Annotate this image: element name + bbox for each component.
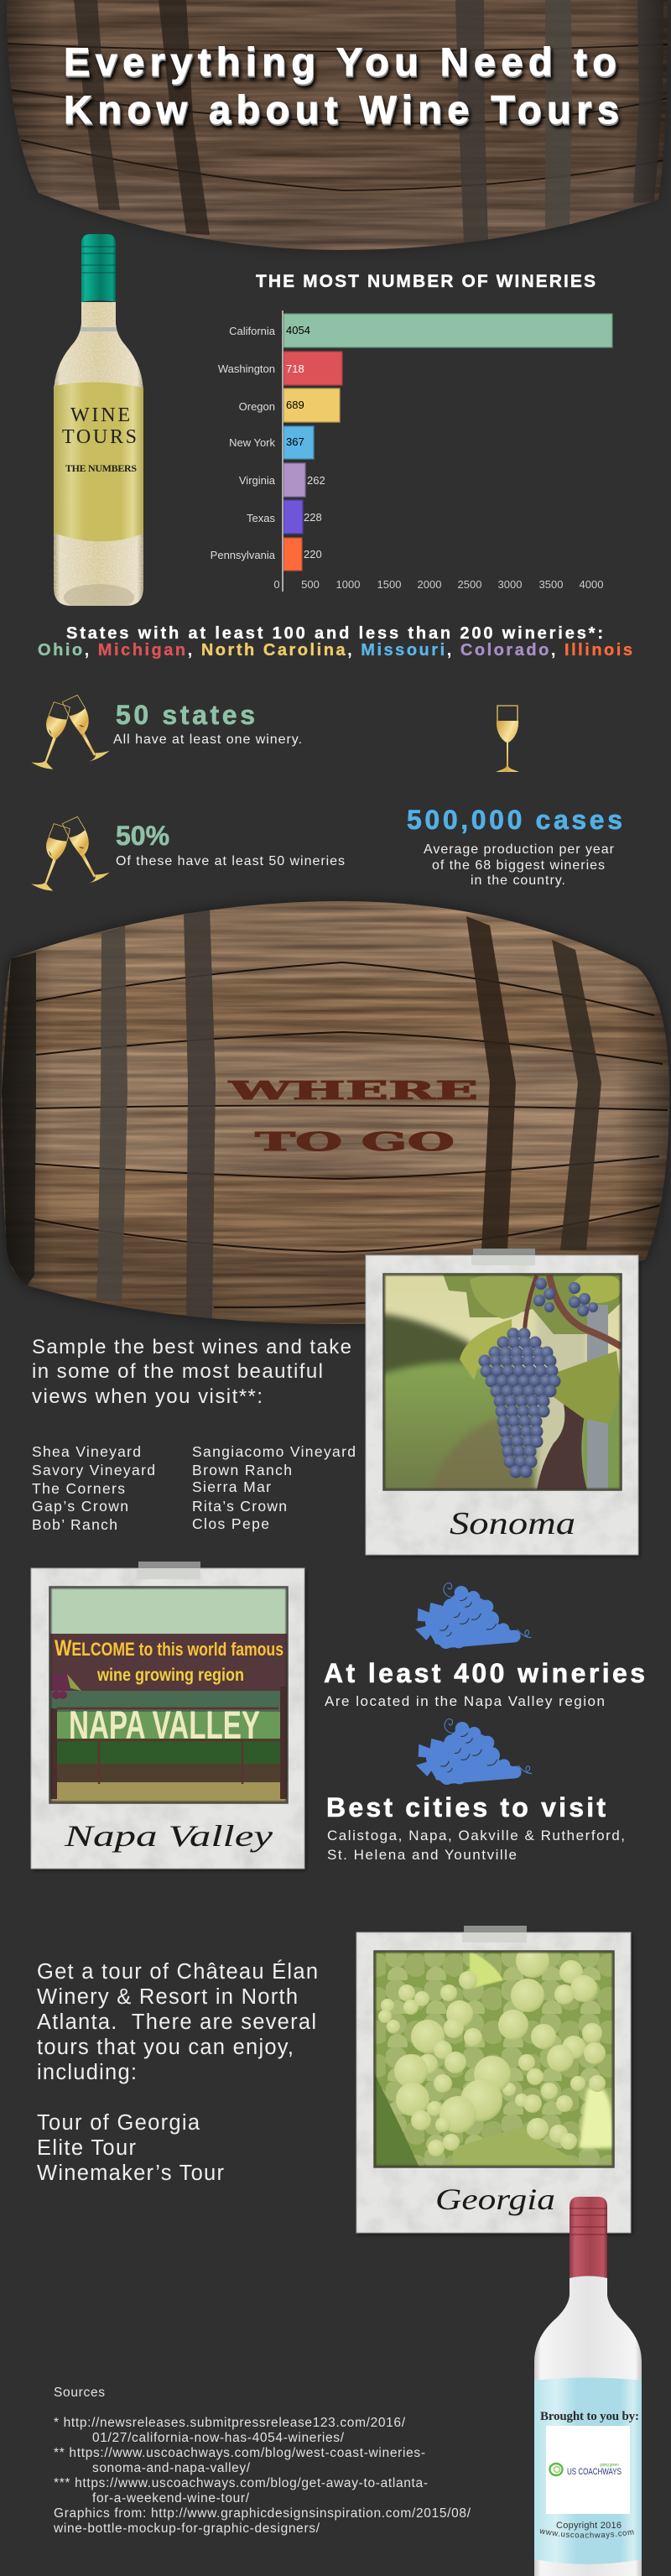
Georgia text: tours that you can enjoy,: [37, 2036, 294, 2059]
value labels: [286, 324, 325, 561]
photo: grapes on vine: [377, 1273, 629, 1494]
states heading: Ohio, Michigan, North Carolina, Missouri, Colorado, Illinois: [38, 641, 632, 660]
vineyard list: [32, 1443, 356, 1533]
value labels: 262: [307, 474, 325, 487]
Georgia text: Winemaker’s Tour: [37, 2161, 225, 2185]
barrel text: WHERE: [227, 1077, 478, 1106]
vineyard list: Rita’s Crown: [192, 1498, 287, 1515]
wine bottle: brought to you by: [534, 2197, 642, 2576]
stat: 50%: 50%: [116, 821, 169, 851]
intro text: Sample the best wines and take: [32, 1336, 351, 1358]
value labels: 689: [286, 399, 304, 411]
wine bottle: wine tours the numbers: [50, 234, 147, 611]
tape: [137, 1562, 200, 1579]
sign text: [55, 1640, 283, 1739]
state labels: Washington: [218, 362, 275, 375]
stat: 50 states: 50 states: [116, 700, 255, 730]
sign text: WELCOME to this world famous: [55, 1635, 283, 1661]
Georgia text: Winery & Resort in North: [37, 1985, 298, 2009]
axis ticks: 4000: [580, 578, 603, 591]
best cities: St. Helena and Yountville: [327, 1847, 517, 1863]
caption: Georgia: [435, 2182, 555, 2216]
title: [64, 39, 619, 132]
copyright text: [540, 2521, 634, 2539]
title: Know about Wine Tours: [64, 87, 619, 132]
axis ticks: 500: [301, 578, 320, 591]
Georgia text: including:: [37, 2061, 137, 2084]
chart title: THE MOST NUMBER OF WINERIES: [256, 272, 596, 291]
intro text: in some of the most beautiful: [32, 1360, 323, 1383]
stat: 500,000 cases: of the 68 biggest wineries: [432, 858, 605, 873]
axis ticks: 2500: [458, 578, 481, 591]
vineyard list: Shea Vineyard: [32, 1443, 141, 1460]
polaroid: Sonoma: [366, 1249, 640, 1557]
polaroid: Georgia: [356, 1926, 632, 2234]
Georgia text: Atlanta. There are several: [37, 2010, 316, 2034]
label text: TOURS: [62, 426, 137, 448]
white logo panel: [546, 2426, 630, 2514]
value labels: 718: [286, 362, 304, 375]
barrel text: [227, 1077, 478, 1157]
Georgia text: [37, 1959, 318, 2185]
barrel text: TO GO: [255, 1128, 455, 1157]
bar chart: wineries by state: [211, 310, 612, 592]
sources: ** https://www.uscoachways.com/blog/west-coast-wineries-: [54, 2446, 425, 2460]
bottle cap: [570, 2197, 607, 2278]
copyright text: www.uscoachways.com: [540, 2529, 634, 2539]
bottle cap: [81, 234, 116, 302]
stat: 50%: Of these have at least 50 wineries: [116, 854, 345, 868]
axis ticks: 3500: [539, 578, 563, 591]
icon: grapes: [416, 1719, 532, 1785]
vineyard list: Brown Ranch: [192, 1462, 292, 1478]
stat: 400 wineries: Are located in the Napa Valley region: [325, 1693, 605, 1709]
label heading: Brought to you by:: [540, 2410, 639, 2423]
icon: clinking glasses: [31, 816, 110, 891]
axis ticks: 2000: [418, 578, 441, 591]
state labels: [211, 325, 276, 561]
stat: 400 wineries: At least 400 wineries: [324, 1658, 645, 1688]
Georgia text: Tour of Georgia: [37, 2111, 200, 2135]
stat: 500,000 cases: in the country.: [471, 873, 565, 888]
axis ticks: 3000: [498, 578, 522, 591]
logo: US Coachways: going green: [600, 2463, 619, 2468]
states heading: [38, 624, 632, 660]
vineyard list: Savory Vineyard: [32, 1462, 155, 1478]
title: Everything You Need to: [64, 39, 616, 84]
logo: US Coachways: US COACHWAYS: [567, 2467, 622, 2477]
label text: [62, 404, 137, 474]
sources: *** https://www.uscoachways.com/blog/get-away-to-atlanta-: [54, 2476, 428, 2490]
axis ticks: 1000: [336, 578, 360, 591]
stat: 400 wineries: [324, 1658, 645, 1709]
axis line: [282, 310, 283, 592]
axis ticks: [273, 578, 603, 591]
bars: [283, 314, 612, 571]
where to go barrel: [0, 898, 671, 1326]
value labels: 4054: [286, 324, 310, 336]
bottle label: [534, 2378, 642, 2564]
intro text: views when you visit**:: [32, 1385, 263, 1408]
best cities: [326, 1792, 625, 1863]
copyright text: Copyright 2016: [556, 2521, 622, 2531]
bottle glass: [534, 2276, 642, 2576]
vineyard list: Bob’ Ranch: [32, 1516, 117, 1533]
stat: 50 states: All have at least one winery.: [113, 733, 302, 747]
sign text: wine growing region: [96, 1666, 244, 1685]
vineyard list: Sangiacomo Vineyard: [192, 1443, 356, 1460]
value labels: 220: [304, 548, 322, 561]
photo: Napa Valley sign: [49, 1587, 288, 1803]
polaroid: Napa Valley: [31, 1562, 306, 1870]
state labels: Virginia: [239, 474, 276, 487]
vineyard list: The Corners: [32, 1480, 125, 1497]
sources: 01/27/california-now-has-4054-wineries/: [92, 2431, 345, 2445]
stat: 500,000 cases: 500,000 cases: [407, 805, 622, 835]
stat: 50%: [116, 821, 345, 868]
state labels: Pennsylvania: [211, 549, 276, 561]
stat: 50 states: [113, 700, 302, 747]
axis ticks: 1500: [377, 578, 401, 591]
photo: white grapes: [374, 1944, 614, 2167]
label text: WINE: [70, 404, 130, 426]
states heading: States with at least 100 and less than 200 wineries*:: [66, 624, 603, 643]
sources: * http://newsreleases.submitpressrelease123.com/2016/: [54, 2416, 406, 2430]
best cities: Best cities to visit: [326, 1792, 606, 1822]
icon: grapes: [415, 1583, 531, 1649]
label text: THE NUMBERS: [65, 462, 137, 474]
state labels: Texas: [247, 512, 275, 524]
value labels: 367: [286, 435, 304, 448]
vineyard list: Sierra Mar: [192, 1478, 271, 1495]
sources: sonoma-and-napa-valley/: [92, 2461, 251, 2475]
value labels: 228: [304, 511, 322, 524]
sources: wine-bottle-mockup-for-graphic-designers/: [53, 2521, 320, 2536]
caption: Napa Valley: [64, 1819, 273, 1853]
logo: US Coachways: [550, 2463, 622, 2477]
icon: champagne glass: [496, 706, 519, 772]
intro text: [32, 1336, 351, 1408]
state labels: Oregon: [239, 400, 275, 413]
axis ticks: 0: [273, 578, 280, 591]
icon: clinking glasses: [31, 695, 110, 769]
sources: for-a-weekend-wine-tour/: [92, 2491, 250, 2506]
sources: Sources: [54, 2386, 105, 2400]
tape: [471, 1249, 535, 1265]
caption: Sonoma: [450, 1506, 575, 1541]
top wine barrel: [0, 0, 671, 252]
Georgia text: Elite Tour: [37, 2136, 136, 2160]
sources: [53, 2386, 471, 2536]
bottle label: [54, 382, 143, 541]
vineyard list: Clos Pepe: [192, 1515, 269, 1532]
Georgia text: Get a tour of Château Élan: [37, 1959, 318, 1984]
stat: 500,000 cases: [407, 805, 622, 888]
sign text: NAPA VALLEY: [69, 1703, 260, 1747]
bottle glass: [54, 302, 143, 606]
vineyard list: Gap’s Crown: [32, 1498, 128, 1515]
stat: 500,000 cases: Average production per year: [424, 842, 615, 857]
tape: [462, 1926, 527, 1942]
state labels: New York: [229, 436, 275, 449]
sources: Graphics from: http://www.graphicdesignsinspiration.com/2015/08/: [54, 2506, 471, 2521]
state labels: California: [229, 325, 276, 337]
best cities: Calistoga, Napa, Oakville & Rutherford,: [327, 1828, 625, 1843]
